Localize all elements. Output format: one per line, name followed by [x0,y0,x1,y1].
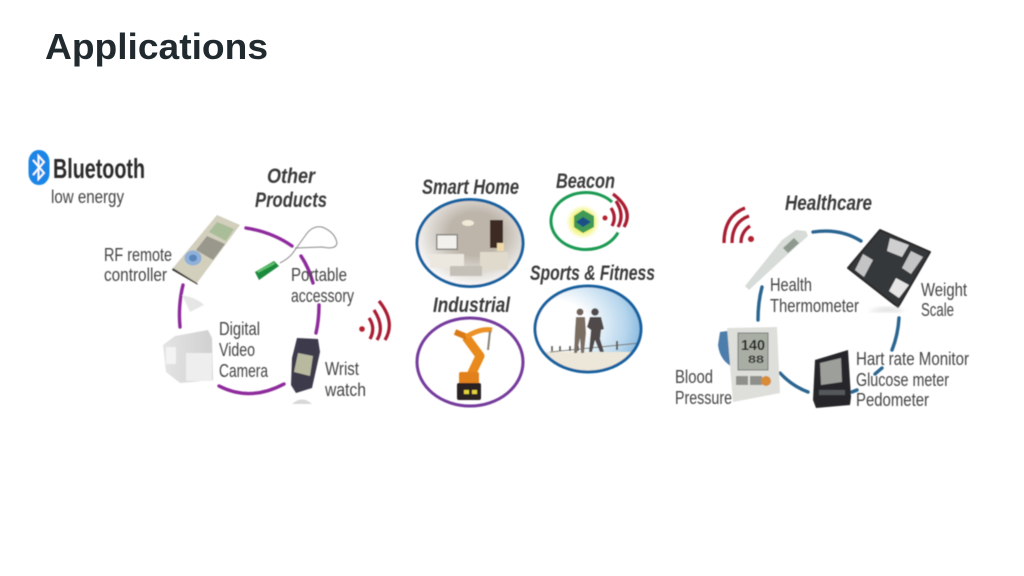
labels: Pressure [675,388,732,408]
heading: Healthcare [785,192,872,215]
icon: Bluetooth rune [28,150,50,185]
labels: Blood [675,367,713,387]
icon: blood pressure monitor: 88 [748,354,764,366]
icon: wireless signal [724,208,754,243]
labels: Camera [219,361,269,381]
labels: watch [324,380,366,400]
labels: Video [219,340,255,360]
labels: Portable [291,265,347,285]
labels: Health [770,275,812,295]
labels: Hart rate Monitor [856,349,969,369]
title: Applications [45,26,268,67]
ring [551,193,618,250]
purple ring arcs [179,228,319,394]
photo: runners [536,286,640,372]
labels: Weight [921,280,967,300]
panel: industrial [417,294,523,406]
icon: wrist watch [291,338,320,404]
labels: Scale [921,300,954,320]
labels: Thermometer [770,296,859,316]
ring [535,286,641,372]
ring [417,200,523,286]
heading: Industrial [433,294,511,317]
heading: Other Products: Products [255,189,327,212]
icon: wireless signal [602,194,627,227]
diagram: Bluetooth low energy applications [28,150,969,410]
heading: Smart Home [422,176,519,199]
ring [417,318,523,406]
icon: thermometer [745,230,808,290]
heading: Other Products [255,165,327,212]
labels: Pedometer [856,390,929,410]
icon: blood pressure monitor [718,327,780,402]
heading: Beacon [556,170,615,193]
labels: Wrist [325,359,359,379]
logo: Bluetooth low energy [28,150,145,207]
panel: sports and fitness [530,262,655,375]
tagline: low energy [51,187,124,207]
icon: portable accessory [255,227,337,280]
labels: accessory [291,286,354,306]
panel: beacon [551,170,627,250]
panel: smart home [415,176,525,288]
icon: wireless signal [359,301,389,340]
labels: Digital [219,319,260,339]
icon: digital video camera [163,330,213,383]
panel: healthcare [675,192,969,410]
labels: RF remote [104,245,172,265]
panel: other products [104,165,389,404]
labels: Glucose meter [856,370,949,390]
labels [104,245,366,400]
icon: beacon device [566,205,600,239]
heading: Sports & Fitness [530,262,655,285]
labels: controller [104,265,167,285]
blue ring arcs [758,231,899,392]
icon: robot arm [455,330,492,400]
icon: RF remote controller [172,215,240,312]
heading: Other Products: Other [267,165,317,188]
icon: heart rate monitor [813,350,851,408]
labels [675,275,969,410]
photo: living room [415,198,525,288]
icon: weight scale [848,230,930,312]
wordmark: Bluetooth [53,153,145,184]
icon: blood pressure monitor: 140 [741,337,765,354]
